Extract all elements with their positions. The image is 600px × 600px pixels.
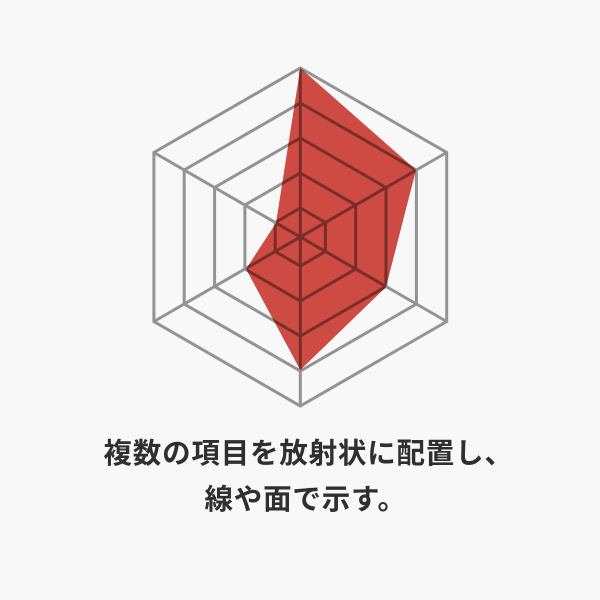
caption line 2: 線や面で示す。: [204, 484, 407, 516]
caption line 1: 複数の項目を放射状に配置し、: [104, 438, 514, 470]
radar grid: [154, 68, 447, 406]
data polygon: [246, 68, 416, 370]
